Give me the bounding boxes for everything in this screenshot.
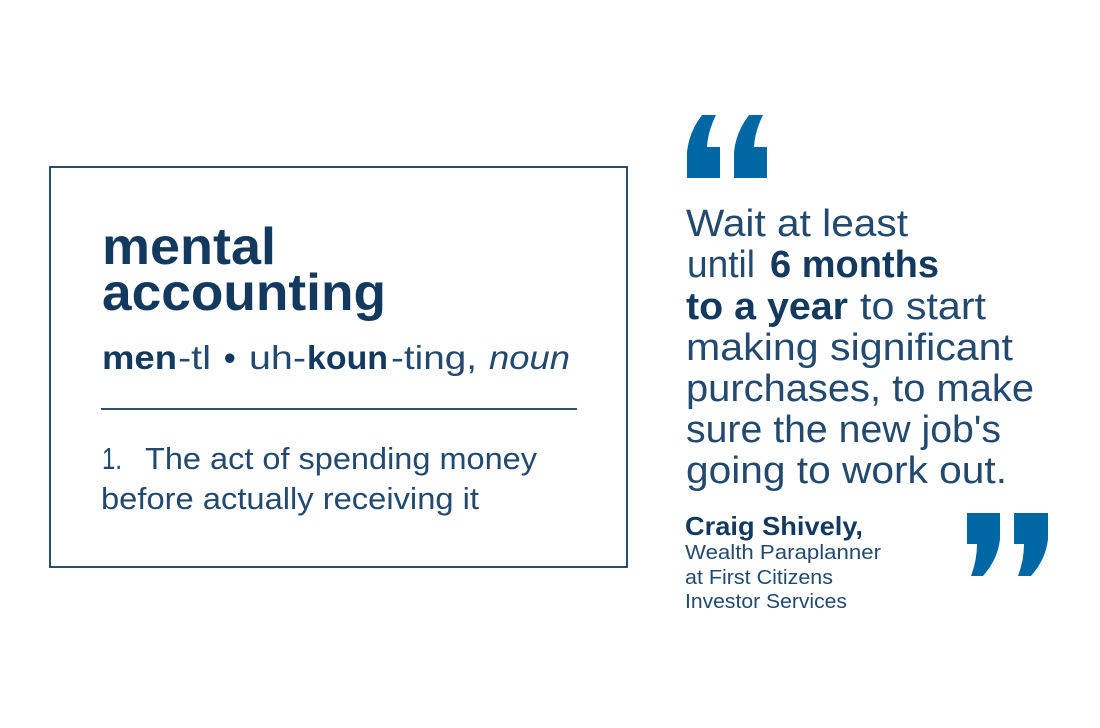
text: definition: before actually receiving it [101,481,479,516]
text: attribution [685,511,881,613]
heading: mental accounting: mental [102,218,276,276]
text: quote: Wait at least [686,203,908,245]
text: attribution: Wealth Paraplanner [685,541,881,564]
text: pronunciation: koun [307,339,388,376]
text: attribution: at First Citizens [685,566,833,589]
text: pronunciation [102,339,570,376]
text: pronunciation: -tl [178,339,211,376]
text: quote: to start [860,286,986,328]
text: pronunciation: men [102,339,177,376]
text: pronunciation: -ting, [391,339,477,376]
text: definition [101,441,538,516]
text: quote: to a year [686,286,848,328]
text: quote: 6 months [770,244,939,286]
text: attribution: Investor Services [685,590,847,613]
text: quote: until [687,244,755,286]
text: pronunciation: noun [489,339,570,376]
text: attribution: Craig Shively, [685,511,863,541]
icon: opening quotation mark [687,115,767,178]
text: quote [686,203,1034,492]
heading: mental accounting [102,218,386,322]
text: definition: The act of spending money [145,441,538,476]
text: quote: purchases, to make [686,368,1034,410]
text: pronunciation: uh- [249,339,306,376]
text: quote: making significant [686,327,1013,369]
text: pronunciation: • [224,339,236,376]
panel: definition box [50,167,627,567]
text: definition: 1. [102,441,122,476]
heading: mental accounting: accounting [102,264,386,322]
icon: closing quotation mark [967,513,1048,576]
text: quote: sure the new job's [686,409,1001,451]
text: quote: going to work out. [686,450,1007,492]
